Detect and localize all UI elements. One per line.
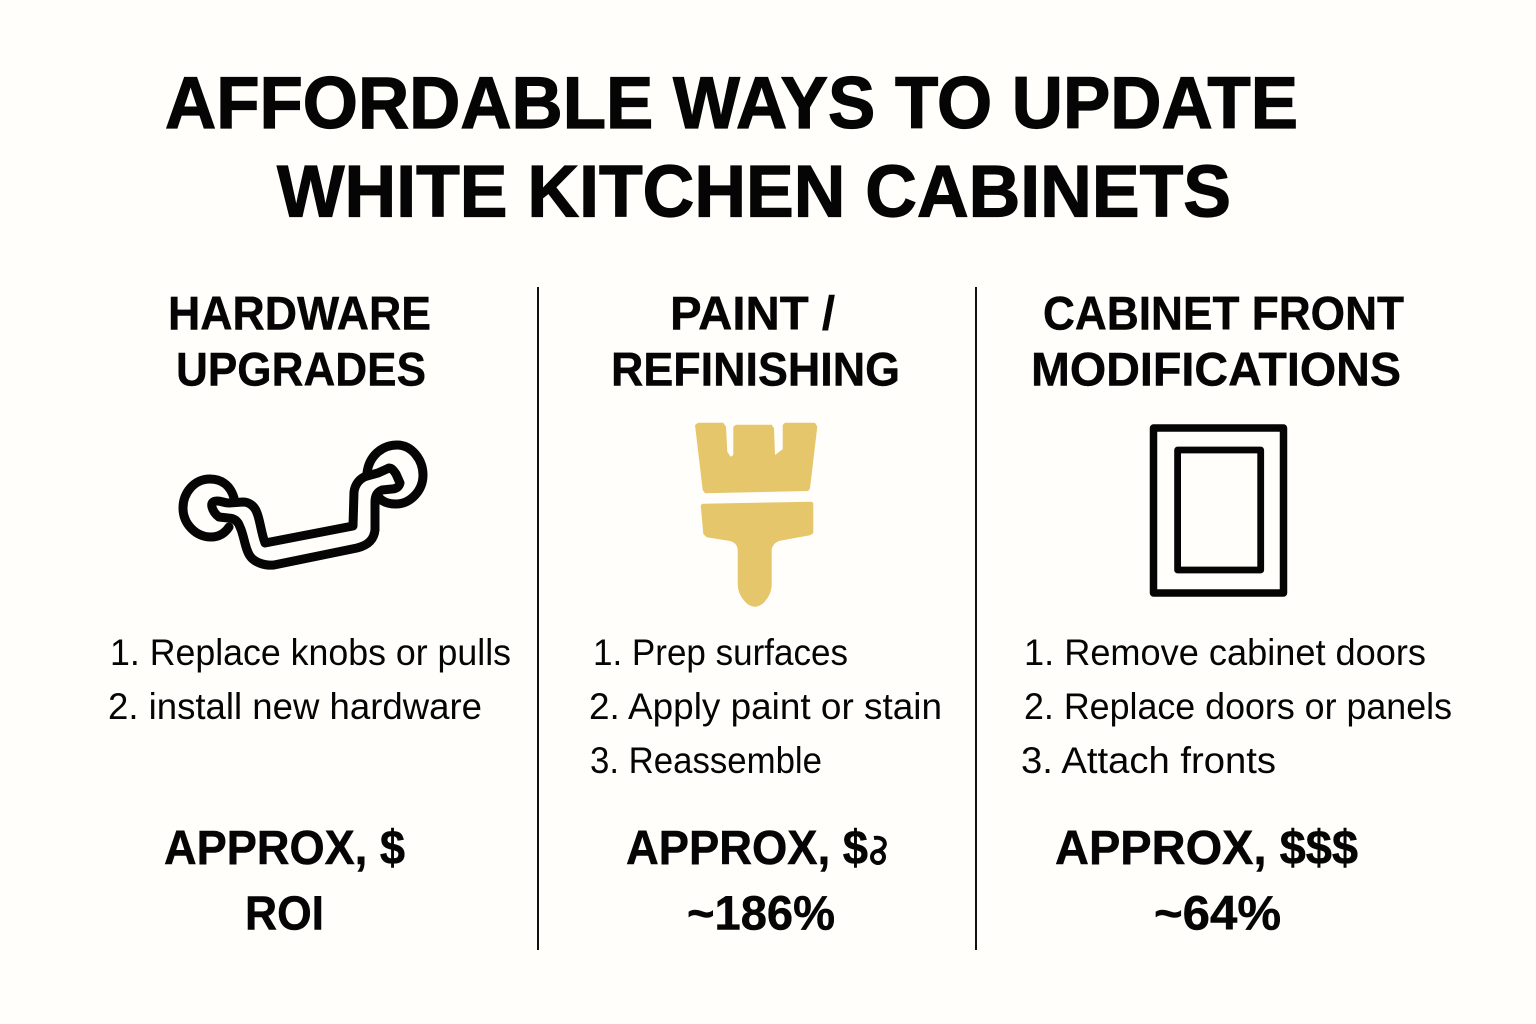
steps: cabinet fronts: 2. Replace doors or panels (1024, 686, 1452, 727)
steps: cabinet fronts (1021, 632, 1452, 781)
title: AFFORDABLE WAYS TO UPDATE (165, 63, 1298, 144)
panel: paint / refinishing (589, 286, 942, 940)
icon: cabinet pull handle (183, 445, 423, 565)
title (165, 63, 1298, 232)
cost and ROI: hardware: APPROX, $ (164, 822, 405, 875)
heading: paint / refinishing: REFINISHING (611, 342, 900, 396)
steps: hardware: 1. Replace knobs or pulls (110, 632, 511, 673)
cost and ROI: cabinet fronts: APPROX, $$$ (1055, 822, 1358, 875)
steps: cabinet fronts: 3. Attach fronts (1021, 740, 1276, 781)
steps: hardware: 2. install new hardware (108, 686, 482, 727)
heading: hardware upgrades: UPGRADES (176, 342, 426, 396)
panel: cabinet front modifications (1021, 286, 1452, 940)
title: WHITE KITCHEN CABINETS (277, 152, 1231, 232)
steps: paint: 3. Reassemble (590, 740, 822, 781)
steps: cabinet fronts: 1. Remove cabinet doors (1024, 632, 1426, 673)
steps: paint: 1. Prep surfaces (593, 632, 848, 673)
cost and ROI: cabinet fronts: ~64% (1154, 888, 1281, 940)
heading: hardware upgrades: HARDWARE (168, 286, 431, 340)
steps: paint (589, 632, 942, 781)
cost and ROI: hardware: ROI (245, 888, 324, 940)
heading: cabinet front modifications (1031, 286, 1404, 396)
steps: paint: 2. Apply paint or stain (589, 686, 942, 727)
heading: cabinet front modifications: CABINET FRONT (1043, 286, 1404, 340)
heading: hardware upgrades (168, 286, 431, 396)
icon: cabinet door frame (1154, 428, 1284, 593)
heading: paint / refinishing (611, 286, 900, 396)
cost and ROI: paint (626, 822, 885, 940)
cost and ROI: paint: ~186% (687, 888, 835, 940)
icon: paint brush (695, 423, 817, 607)
cost and ROI: paint: APPROX, $ (626, 822, 868, 875)
heading: paint / refinishing: PAINT / (670, 286, 835, 340)
cost and ROI: hardware (164, 822, 405, 940)
heading: cabinet front modifications: MODIFICATIONS (1031, 342, 1401, 396)
panel: hardware upgrades (108, 286, 511, 940)
steps: hardware (108, 632, 511, 727)
cost and ROI: cabinet fronts (1055, 822, 1358, 940)
